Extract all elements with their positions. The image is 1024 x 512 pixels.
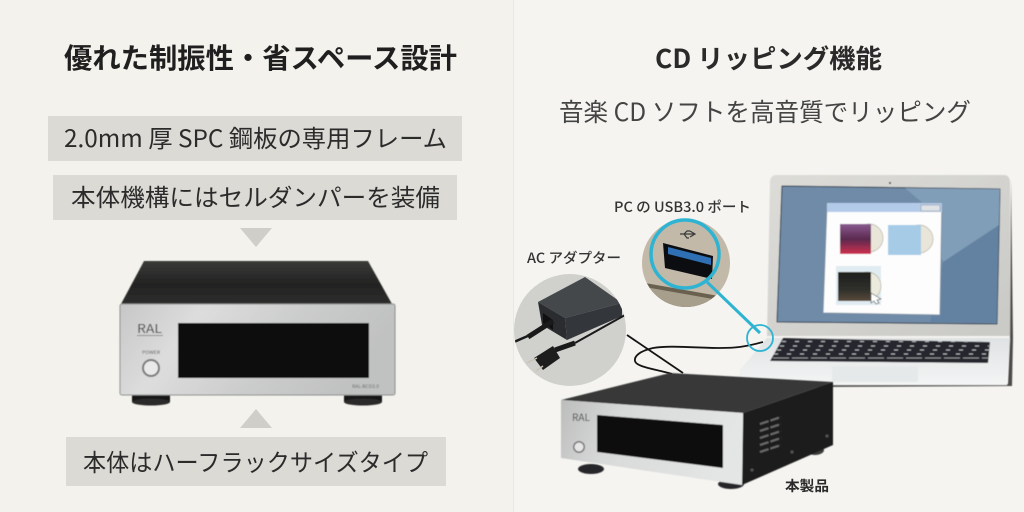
inset: AC adapter	[514, 274, 626, 386]
power button	[573, 441, 585, 453]
trackpad	[832, 366, 918, 382]
device side with vents	[742, 382, 833, 485]
feet	[578, 445, 824, 489]
label box: cell damper	[53, 175, 457, 220]
power button	[142, 359, 160, 377]
album: selected city night cover	[836, 266, 881, 305]
display window	[597, 415, 723, 468]
label: this product: 本製品	[785, 476, 829, 496]
callout line and ring	[707, 282, 773, 351]
app window	[823, 203, 942, 315]
label: USB port: PC の USB3.0 ポート	[614, 197, 751, 217]
device top	[121, 261, 392, 304]
inset: USB port	[640, 219, 730, 310]
left foot	[132, 395, 170, 406]
label box: half rack	[66, 437, 446, 486]
label box: cell damper: 本体機構にはセルダンパーを装備	[71, 178, 440, 213]
device front panel	[120, 304, 395, 395]
subtitle: 音楽 CD ソフトを高音質でリッピング	[559, 93, 971, 129]
label: AC adapter: AC アダプター	[527, 248, 621, 268]
product: angled device	[561, 373, 833, 489]
front panel	[561, 400, 743, 485]
plug and output cord	[527, 315, 625, 371]
port shadow strip	[646, 283, 716, 307]
power label: POWER	[142, 350, 160, 356]
display window	[178, 323, 369, 378]
device top	[561, 373, 833, 413]
arrow: up	[240, 409, 272, 428]
cursor icon	[871, 293, 881, 304]
USB socket	[663, 243, 713, 279]
laptop shadow	[800, 180, 1013, 387]
laptop lid	[767, 175, 1010, 336]
highlight ring	[651, 220, 719, 288]
laptop screen	[777, 182, 1000, 324]
USB symbol	[680, 231, 695, 238]
label box: frame: 2.0mm 厚 SPC 鋼板の専用フレーム	[64, 119, 447, 154]
keyboard	[770, 338, 990, 363]
mains cord	[514, 335, 530, 342]
arrow: down	[240, 228, 272, 247]
album: blue cover	[888, 225, 933, 255]
album: red cover	[840, 224, 883, 254]
laptop	[735, 175, 1013, 387]
laptop base	[735, 338, 1010, 385]
product: front view device	[120, 261, 395, 406]
model label: RAL-BCD3.0	[352, 384, 380, 390]
right foot	[344, 395, 382, 406]
adapter body	[538, 277, 622, 340]
cables from adapter and product to laptop	[627, 335, 763, 374]
RAL logo: RAL	[572, 409, 591, 424]
RAL logo: RAL	[137, 320, 163, 337]
label box: half rack: 本体はハーフラックサイズタイプ	[83, 443, 428, 478]
heading: right panel title: CD リッピング機能	[655, 39, 882, 76]
heading: left panel title: 優れた制振性・省スペース設計	[64, 37, 457, 77]
